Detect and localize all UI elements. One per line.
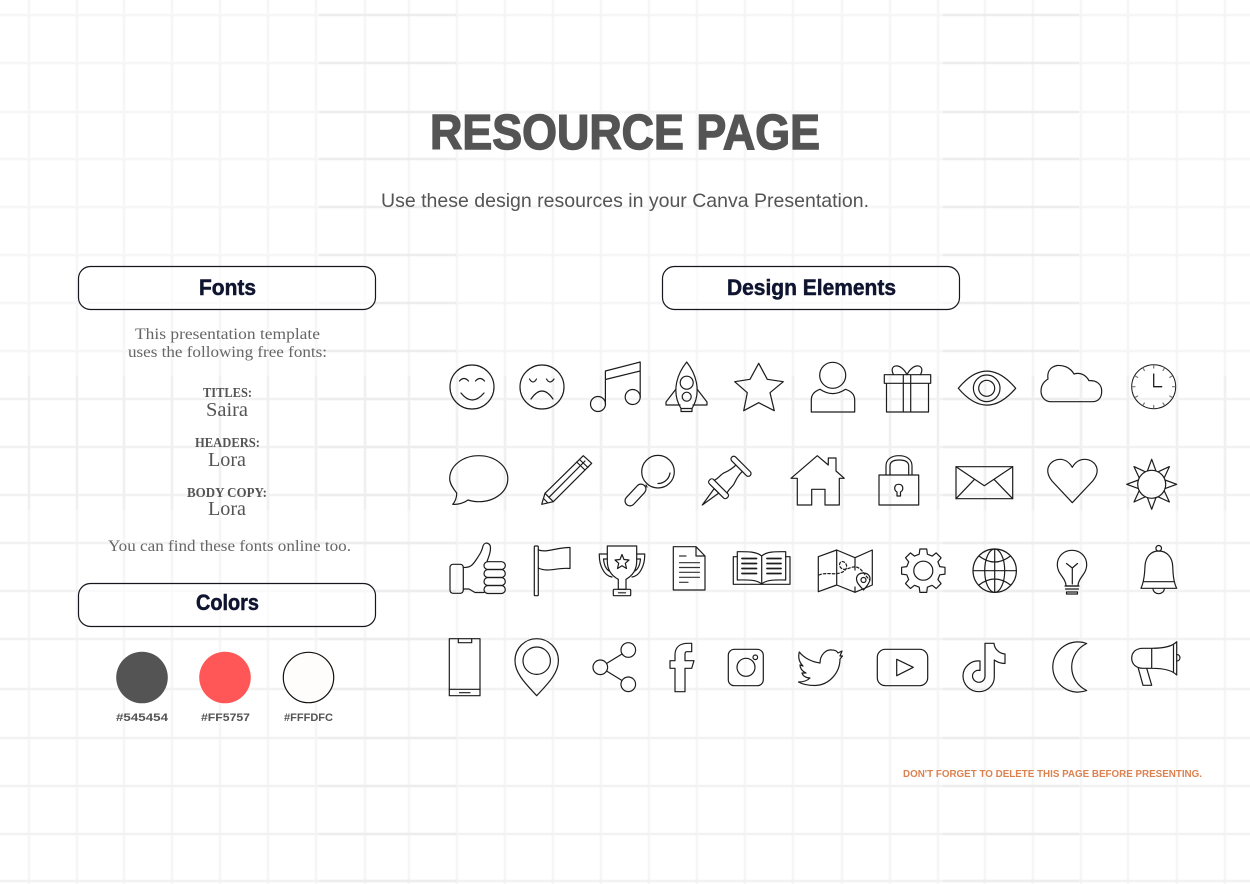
icon: open book [733,552,790,584]
subtitle: Use these design resources in your Canva Presentation. [381,190,869,212]
icon: person [811,362,855,412]
icon: smile [450,365,494,409]
icon: star [735,363,783,411]
icon: cloud [1041,365,1102,402]
panel: colors [78,584,376,724]
icon: phone [449,639,480,696]
text: font intro: This presentation template [135,326,320,343]
icon: map [818,550,872,592]
heading: design elements: Design Elements [727,275,896,300]
icon: document [673,547,705,590]
text: headers font [195,435,260,471]
heading: fonts [78,266,376,310]
icon: speech bubble [450,456,508,504]
icon: flag [534,546,570,596]
icon: push pin [693,455,752,514]
icon: rocket [666,362,707,412]
title: RESOURCE PAGE [430,106,820,160]
text: fonts note: You can find these fonts online too. [108,538,351,555]
swatch: dark grey: #545454 [116,712,169,724]
icon: clock [1132,365,1176,409]
panel: fonts [78,266,376,555]
icon: tiktok [963,643,1005,692]
icon: sun [1127,459,1177,509]
icon: twitter [798,650,842,686]
icon: sad face [520,365,564,409]
swatch: red [199,652,251,724]
text: font intro [128,326,327,361]
text: titles font: TITLES: [203,385,252,400]
heading: colors: Colors [196,590,259,615]
icon: eye [958,371,1016,405]
icon: gift [884,366,931,412]
icon: light bulb [1057,550,1087,594]
icon: facebook [670,643,694,692]
icon: youtube [877,649,928,686]
swatch: off white: #FFFDFC [284,712,333,724]
text: font intro: uses the following free fonts: [128,344,327,361]
text: titles font [203,385,252,421]
icon: globe [973,549,1016,592]
icon: pencil [542,456,592,504]
swatch: dark grey [116,652,169,724]
icon: location pin [515,639,558,696]
text: titles font: Saira [206,399,248,421]
icon: magnifier [623,455,674,508]
icon: moon [1053,642,1087,692]
heading: colors [78,584,376,626]
text: headers font: HEADERS: [195,435,260,450]
icon: megaphone [1132,642,1180,685]
icon: heart [1048,459,1097,503]
icon: music note [590,362,640,412]
footer note: DON'T FORGET TO DELETE THIS PAGE BEFORE PRESENTING. [903,768,1202,780]
icon: thumbs up [450,543,505,594]
icon: house [791,456,844,505]
icon: trophy [599,546,645,596]
swatch: red: #FF5757 [201,712,250,724]
text: headers font: Lora [208,449,246,471]
text: body font: BODY COPY: [187,485,267,500]
text: body font [187,485,267,520]
icon: gear [902,549,945,592]
heading: fonts: Fonts [199,275,256,300]
icon: bell [1141,546,1177,594]
icon: share [593,643,636,692]
icon: envelope [956,467,1013,499]
heading: design elements [662,266,960,310]
swatch: off white [283,652,334,724]
panel: design elements [449,266,1180,696]
icon: instagram [728,649,763,686]
text: body font: Lora [208,498,246,520]
icon: padlock [879,456,919,505]
